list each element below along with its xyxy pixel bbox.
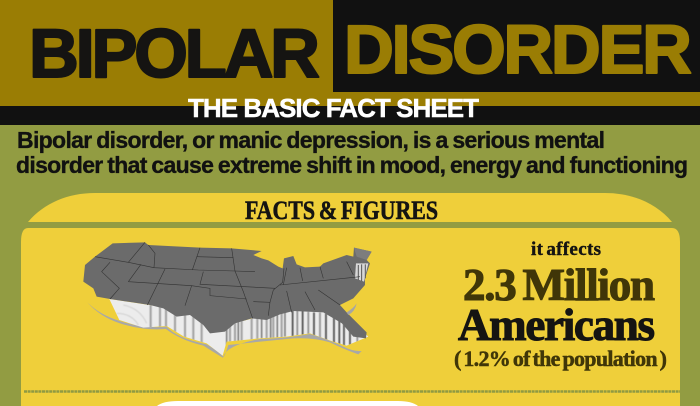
header band [0, 0, 700, 125]
panel: facts body [21, 228, 680, 406]
intro text [16, 127, 688, 178]
map top surface [83, 242, 372, 338]
map east coast edge [355, 263, 368, 282]
intro text: disorder that cause extreme shift in mood, energy and functioning [16, 152, 688, 178]
map: united states relief [83, 242, 373, 358]
map carolina coast sliver [347, 303, 357, 315]
text: 2.3 million: 2.3 Million [463, 260, 655, 310]
text: it affects: it affects [531, 239, 601, 260]
title: disorder: DISORDER [344, 11, 692, 88]
text: americans: Americans [458, 300, 655, 350]
panel: facts heading tab [28, 193, 672, 222]
subtitle: THE BASIC FACT SHEET [188, 93, 479, 123]
text: population share: ( 1.2% of the population ) [454, 346, 667, 371]
affected count [454, 239, 667, 371]
heading: facts and figures: FACTS & FIGURES [245, 196, 438, 225]
map lower rim shadow [87, 302, 362, 358]
title: bipolar: BIPOLAR [29, 15, 320, 92]
white pill panel [157, 401, 418, 406]
map state borders [95, 242, 360, 318]
intro text: Bipolar disorder, or manic depression, is a serious mental [17, 127, 605, 153]
map underside relief [110, 299, 368, 356]
